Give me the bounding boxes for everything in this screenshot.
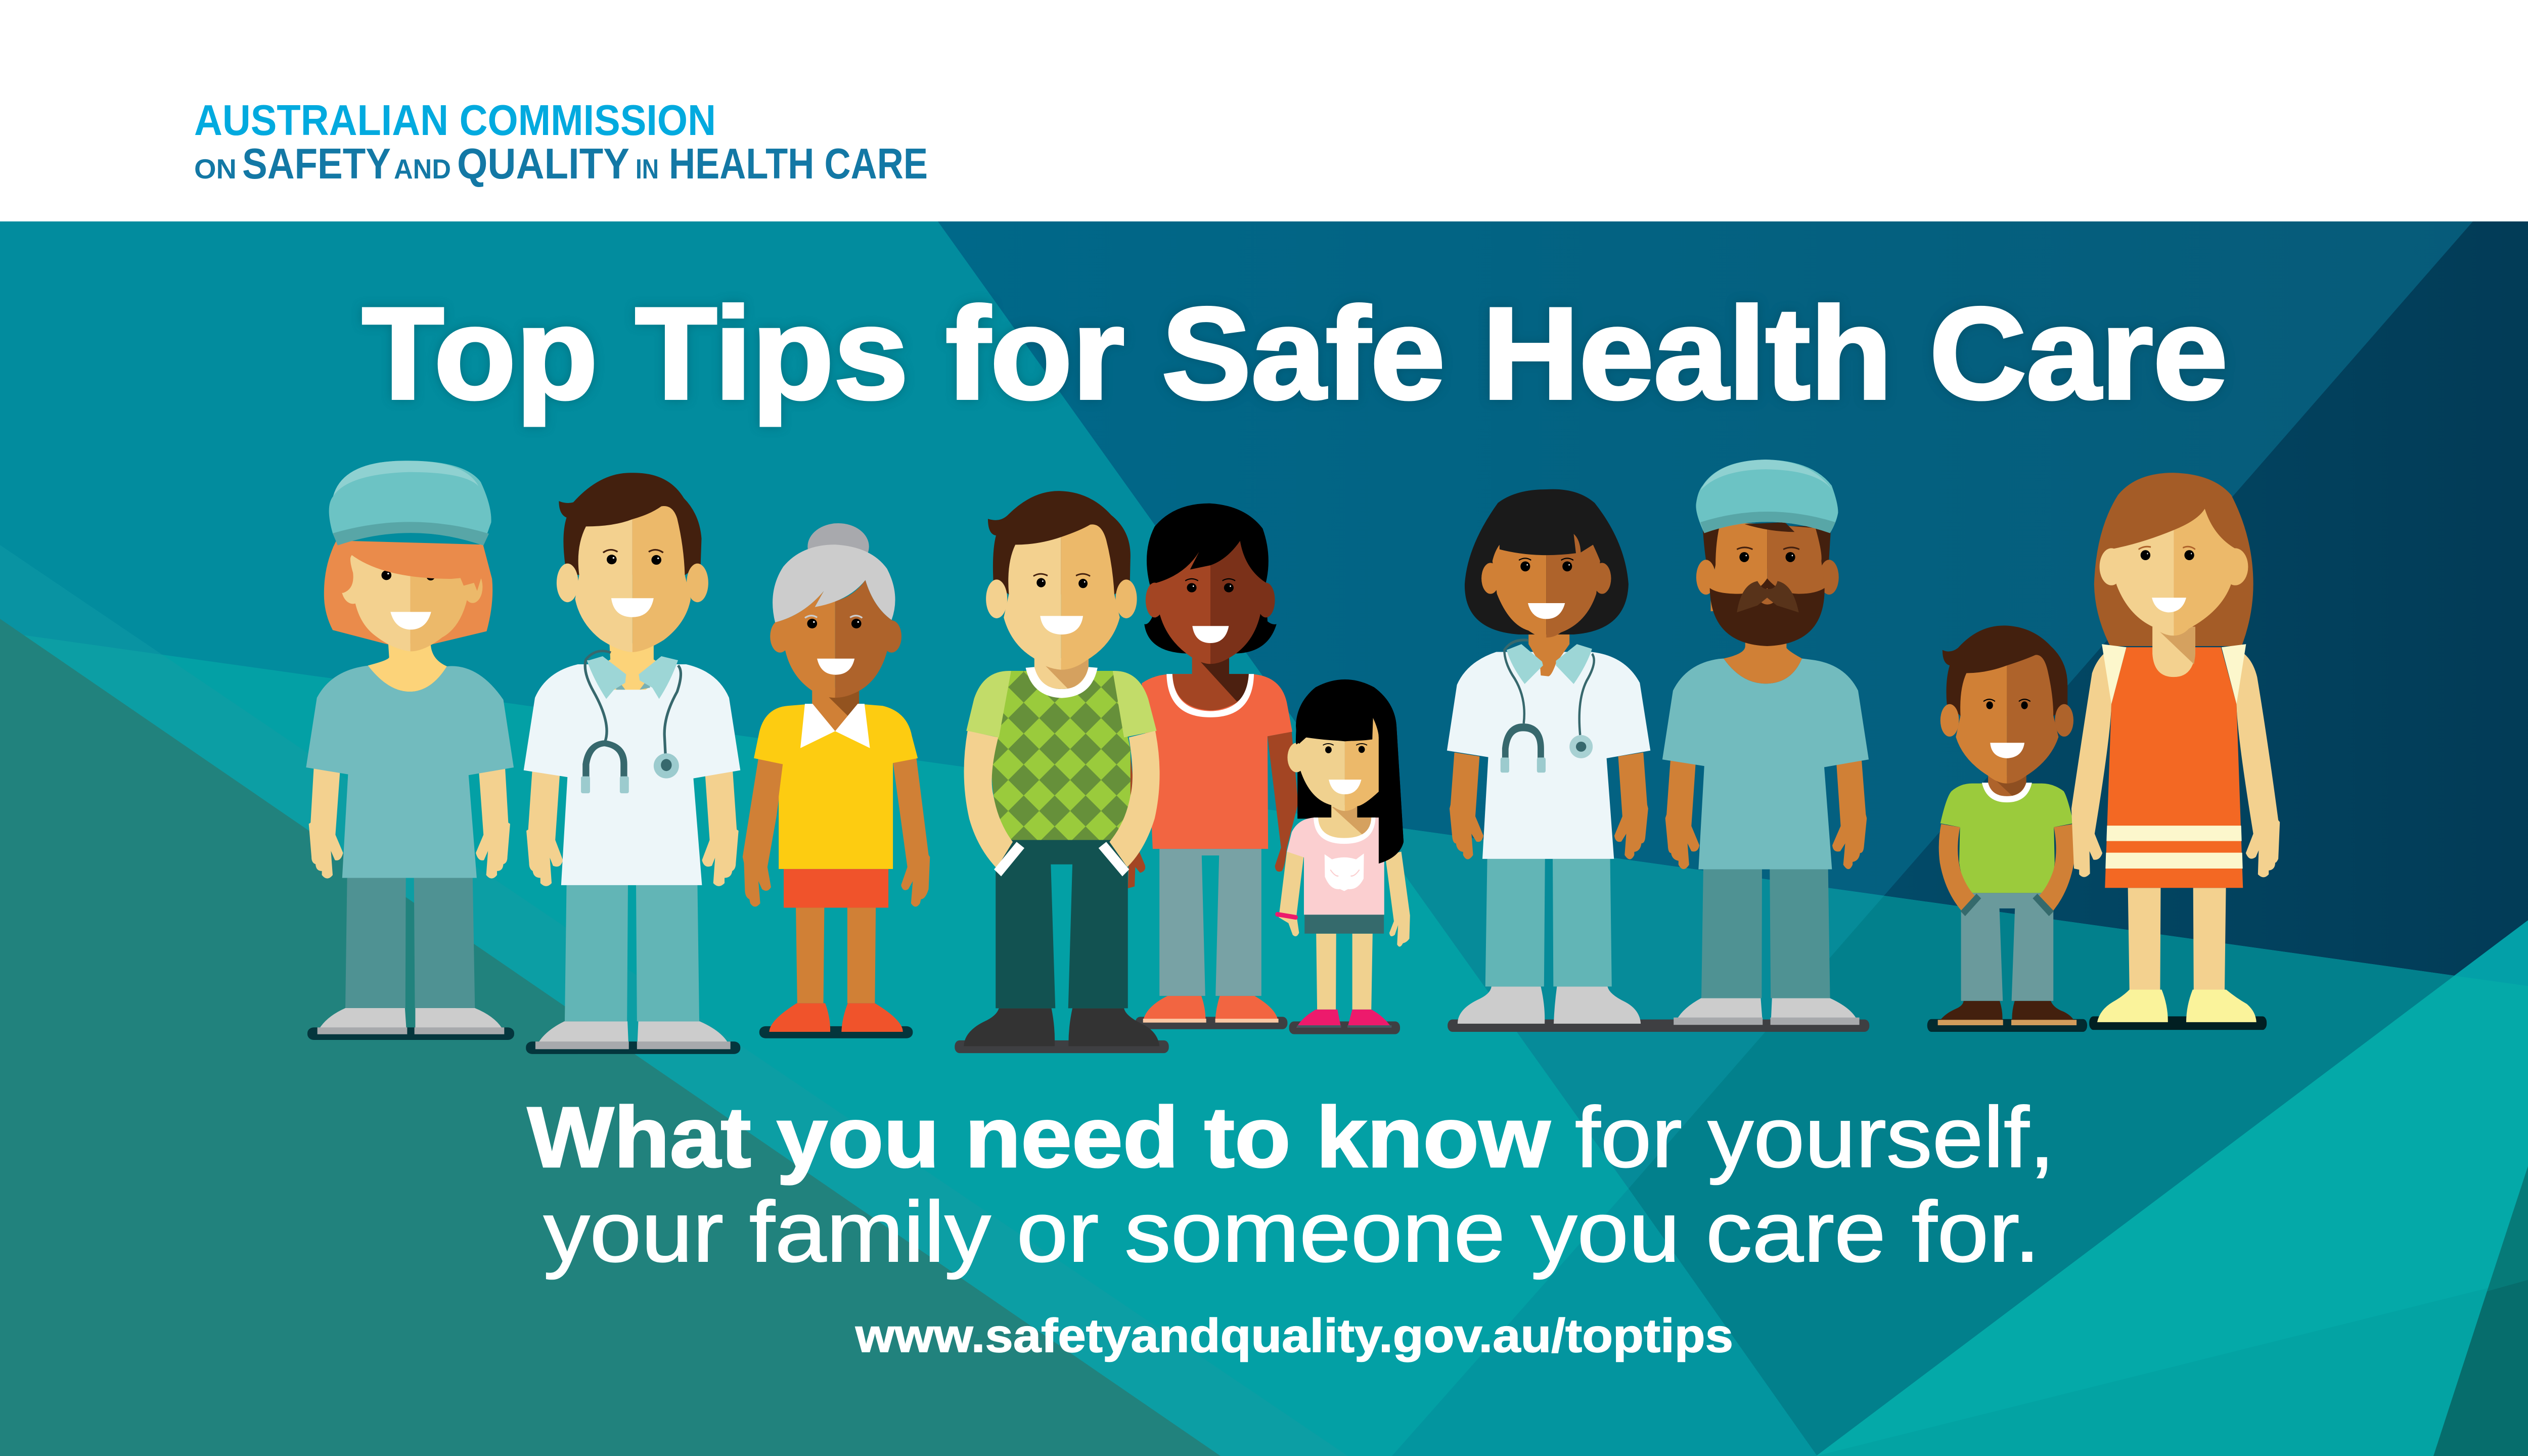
logo: Australian Commission on Safety and Quality in Health Care: AUSTRALIAN COMMISSION bbox=[194, 97, 716, 145]
figure: bearded man with surgical cap bbox=[1662, 460, 1869, 1025]
figure: woman in orange dress bbox=[2071, 473, 2280, 1030]
figure: male doctor with stethoscope bbox=[524, 473, 740, 1054]
logo: Australian Commission on Safety and Quality in Health Care: SAFETY bbox=[242, 140, 391, 188]
figure: girl in pink cat top bbox=[1277, 679, 1410, 1034]
subheading line 1 bbox=[527, 1089, 2055, 1186]
logo: Australian Commission on Safety and Quality in Health Care: HEALTH CARE bbox=[669, 140, 928, 188]
subheading line 1: What you need to know bbox=[527, 1089, 1551, 1186]
logo: Australian Commission on Safety and Quality in Health Care bbox=[194, 97, 928, 188]
figure: boy in green t-shirt bbox=[1927, 625, 2087, 1032]
subheading line 1: for yourself, bbox=[1575, 1089, 2055, 1186]
logo: Australian Commission on Safety and Quality in Health Care: ON bbox=[194, 153, 237, 185]
figure: woman in coral top bbox=[1128, 504, 1298, 1029]
subheading line 2: your family or someone you care for. bbox=[544, 1184, 2040, 1280]
figure: surgical woman with cap bbox=[306, 461, 514, 1040]
figure: older woman in yellow top bbox=[743, 523, 930, 1038]
website URL: www.safetyandquality.gov.au/toptips bbox=[855, 1309, 1733, 1362]
figure: man in argyle vest bbox=[955, 491, 1169, 1053]
logo: Australian Commission on Safety and Quality in Health Care: AND bbox=[394, 153, 451, 185]
logo: Australian Commission on Safety and Quality in Health Care: QUALITY bbox=[457, 140, 629, 188]
title: Top Tips for Safe Health Care bbox=[362, 280, 2228, 427]
white header band bbox=[0, 0, 2528, 221]
logo: Australian Commission on Safety and Quality in Health Care: IN bbox=[636, 153, 659, 185]
figure: female doctor with stethoscope bbox=[1447, 489, 1869, 1032]
